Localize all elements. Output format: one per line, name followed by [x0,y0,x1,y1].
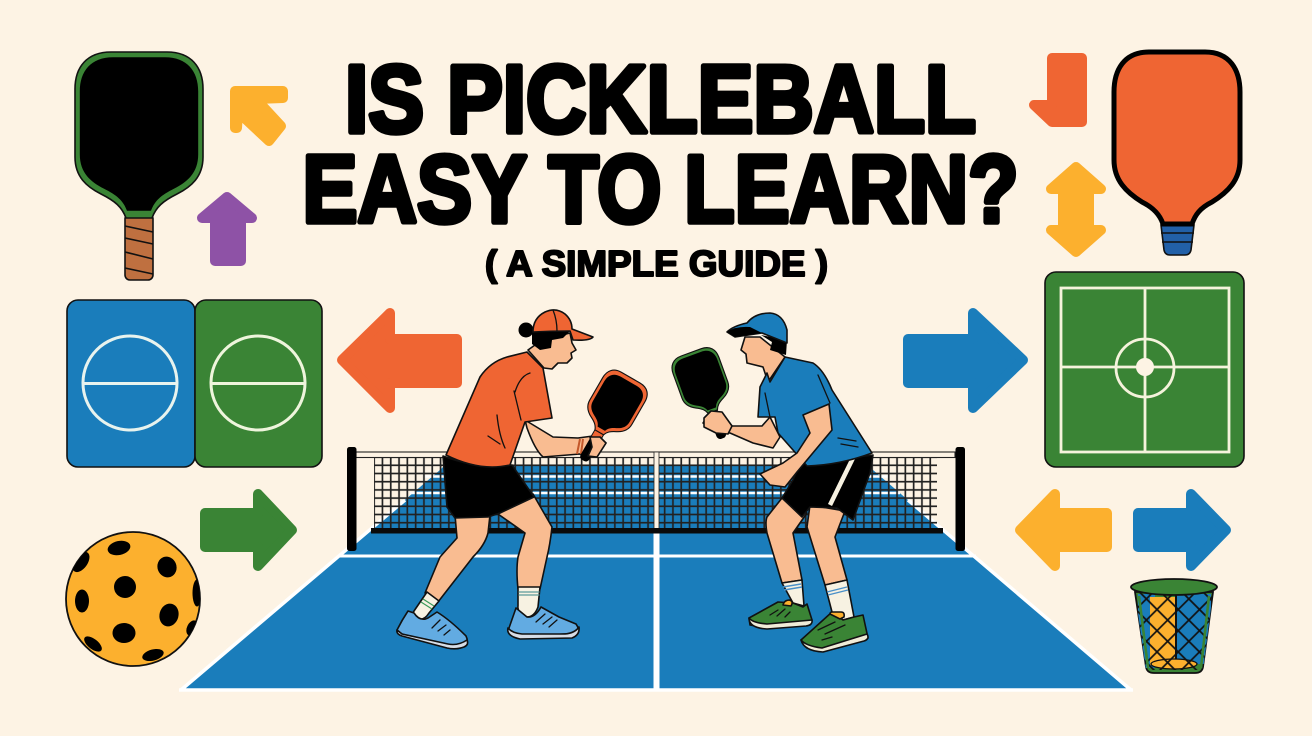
arrow: orange corner [1034,58,1082,122]
icon: yellow pickleball [66,532,202,666]
arrow: purple up [202,197,252,261]
title [302,46,1018,243]
cap [533,310,593,340]
shirt [446,352,552,467]
panel: blue and green service cards [67,300,322,467]
shorts [443,456,534,518]
net post right [956,447,965,551]
icon: black paddle with green edge [75,52,203,280]
socks [782,580,854,620]
cap [727,313,787,343]
paddle [668,344,745,447]
far arm [703,412,780,448]
arrow: large blue right [908,313,1023,408]
hair [761,335,787,355]
shorts [782,455,873,520]
green shoes [749,602,812,628]
bun [518,322,534,338]
arrow: yellow diagonal up-left [235,91,283,141]
arm [525,420,606,457]
arrow: yellow left [1020,494,1107,566]
shirt [758,357,872,466]
back leg [425,515,490,602]
green card [195,300,322,467]
neck and face [741,337,785,382]
front leg [498,494,552,589]
title: IS PICKLEBALL [345,46,976,153]
gripping hand [704,411,732,434]
net post left [347,447,356,551]
court [179,465,1133,690]
hair [532,331,570,350]
net [347,447,965,551]
icon: mesh basket [1130,579,1220,675]
panel: green court diagram [1045,272,1244,467]
paddle [562,366,652,473]
arrow: blue right small [1138,494,1226,566]
wrist band [577,439,583,454]
right leg [807,505,847,585]
icon: orange paddle with blue collar [1114,52,1240,255]
near arm and hand [760,404,832,487]
left leg [766,498,807,583]
left shoes [397,611,467,649]
arrow: green right [205,494,292,566]
player: left in orange [397,310,652,649]
neck and face [528,333,576,369]
blue card [67,300,195,467]
hand [588,437,606,457]
subtitle: ( A SIMPLE GUIDE ) [485,243,828,284]
title: EASY TO LEARN? [302,136,1018,243]
arrow: yellow double vertical [1051,167,1101,252]
socks [413,587,540,619]
arrow: large orange left [342,313,457,408]
player: right in blue [668,313,873,652]
